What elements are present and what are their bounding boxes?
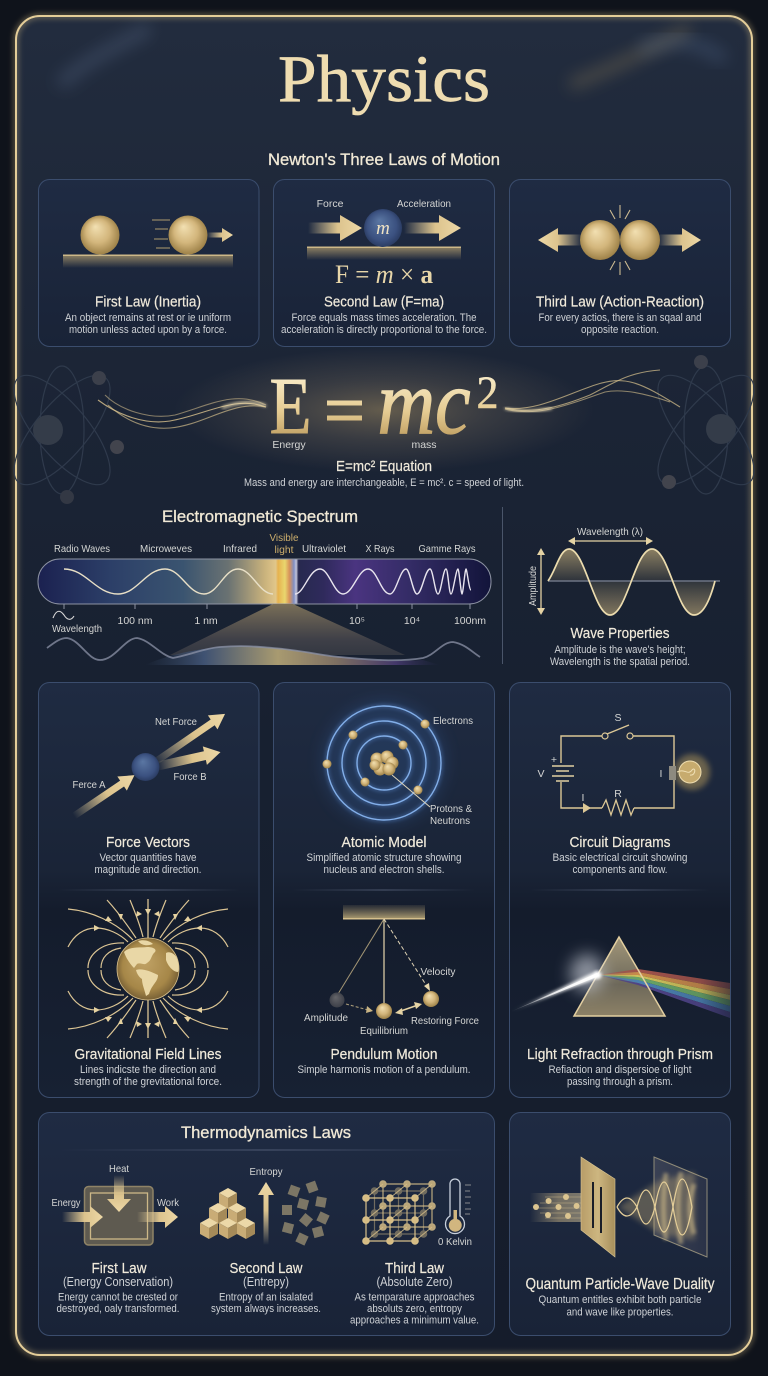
icon: force vectors: Ferce A	[72, 779, 106, 791]
text block: Basic electrical circuit showing	[552, 852, 688, 864]
label: mass: mass	[411, 439, 437, 451]
icon: double slit	[530, 1157, 707, 1257]
label: energy: Energy	[272, 439, 306, 451]
text block	[65, 312, 231, 336]
icon: inertia spheres	[63, 216, 233, 268]
heading: Pendulum Motion	[330, 1046, 438, 1063]
icon: crystal lattice and thermometer	[363, 1179, 472, 1248]
equation glow	[174, 348, 594, 472]
equation E=mc2: mc	[378, 351, 470, 453]
icon: force on mass: Acceleration	[397, 198, 451, 210]
text block: Entropy of an isalated	[219, 1292, 313, 1304]
panel: left column	[38, 682, 259, 1098]
decorative atom left	[0, 361, 126, 504]
prism fan under spectrum	[47, 604, 480, 665]
text block	[56, 1275, 180, 1315]
panel: right column	[510, 682, 730, 1098]
formula: F = m × a	[335, 260, 433, 289]
spectrum labels: Infrared	[223, 543, 257, 555]
text block: For every actios, there is an sqaal and	[538, 312, 702, 324]
heading: Second Law (F=ma)	[324, 294, 444, 310]
equation E=mc2: E	[270, 363, 312, 451]
text block: Lines indicste the direction and	[80, 1064, 216, 1076]
text block	[74, 1064, 222, 1088]
icon: circuit: R	[614, 788, 622, 800]
icon: atom: Protons &	[430, 803, 472, 815]
text block: An object remains at rest or ie uniform	[65, 312, 231, 324]
panel: first law	[38, 180, 259, 346]
panel: second law	[274, 180, 494, 346]
icon: atom	[322, 701, 473, 827]
heading: Newton's laws: Newton's Three Laws of Motion	[268, 150, 500, 169]
text block: components and flow.	[572, 864, 668, 876]
icon: circuit: I	[660, 768, 662, 780]
heading: Third Law (Action-Reaction)	[536, 294, 704, 310]
text block: approaches a minimum value.	[350, 1314, 479, 1326]
text block: and wave like properties.	[566, 1306, 674, 1318]
heading: equation: E=mc² Equation	[336, 458, 432, 475]
heading: Third Law	[385, 1260, 444, 1277]
spectrum axis and scale: 1 nm	[194, 615, 218, 627]
icon: first law energy box: Heat	[109, 1163, 129, 1175]
spectrum labels: light	[274, 544, 294, 556]
text block	[350, 1275, 479, 1326]
icon: force on mass: m	[376, 218, 390, 239]
spectrum labels: Radio Waves	[54, 543, 110, 555]
icon: force on mass: Force	[317, 198, 344, 210]
title: Physics	[278, 42, 490, 116]
text block: As temparature approaches	[354, 1292, 475, 1304]
energy wisps	[98, 370, 680, 428]
heading: Second Law	[230, 1260, 303, 1277]
spectrum axis and scale	[52, 604, 486, 635]
wave properties chart: Amplitude	[527, 566, 539, 606]
heading: Quantum Particle-Wave Duality	[526, 1276, 714, 1293]
text: equation description: Mass and energy are interchangeable, E = mc². c = speed of light.	[244, 477, 524, 489]
text block	[548, 1064, 692, 1088]
icon: circuit	[537, 712, 710, 815]
spectrum labels: Ultraviolet	[302, 543, 346, 555]
panel: quantum	[510, 1112, 730, 1336]
icon: atom: Neutrons	[430, 815, 470, 827]
text block: strength of the grevitational force.	[74, 1076, 222, 1088]
divider	[502, 507, 504, 664]
icon: first law energy box: Work	[157, 1197, 180, 1209]
wave properties chart: Wavelength (λ)	[577, 526, 643, 538]
spectrum axis and scale: 10⁵	[349, 615, 365, 627]
heading: Thermodynamics Laws	[181, 1123, 351, 1142]
text block	[538, 1294, 702, 1318]
heading: Light Refraction through Prism	[527, 1046, 713, 1063]
icon: entropy	[200, 1166, 330, 1246]
text block: nucleus and electron shells.	[324, 864, 444, 876]
spectrum labels	[54, 532, 476, 556]
spectrum axis and scale: Wavelength	[52, 623, 102, 635]
icon: pendulum: Restoring Force	[411, 1015, 479, 1027]
heading: Circuit Diagrams	[570, 834, 670, 851]
panel: third law	[510, 180, 730, 346]
icon: force on mass	[307, 198, 461, 260]
text block	[552, 852, 688, 876]
heading: First Law (Inertia)	[95, 294, 201, 310]
icon: action reaction	[538, 205, 701, 275]
icon: circuit: +	[551, 754, 557, 766]
text block: opposite reaction.	[581, 324, 659, 336]
text block: magnitude and direction.	[94, 864, 202, 876]
spectrum axis and scale: 10⁴	[404, 615, 420, 627]
text block: destroyed, oaly transformed.	[56, 1303, 180, 1315]
icon: force vectors: Net Force	[155, 716, 197, 728]
icon: circuit: V	[537, 768, 545, 780]
panel: middle column	[274, 682, 494, 1098]
text block: Force equals mass times acceleration. The	[292, 312, 476, 324]
icon: circuit: I	[582, 792, 584, 804]
text block: Refiaction and dispersioe of light	[548, 1064, 692, 1076]
icon: force vectors: Force B	[174, 771, 206, 783]
spectrum labels: Gamme Rays	[418, 543, 476, 555]
heading: First Law	[92, 1260, 147, 1277]
text block: Energy cannot be crested or	[58, 1292, 178, 1304]
icon: circuit: S	[614, 712, 622, 724]
icon: atom: Electrons	[433, 715, 473, 727]
icon: force vectors	[69, 707, 230, 823]
text block: passing through a prism.	[567, 1076, 673, 1088]
text block: (Entrepy)	[243, 1275, 289, 1289]
icon: pendulum	[304, 905, 479, 1037]
icon: crystal lattice and thermometer: 0 Kelvin	[438, 1236, 472, 1248]
text block: (Energy Conservation)	[63, 1275, 173, 1289]
heading: wave properties: Wave Properties	[570, 625, 670, 642]
spectrum axis and scale: 100 nm	[117, 615, 153, 627]
decorative atom right	[642, 355, 768, 499]
icon: pendulum: Velocity	[420, 966, 456, 978]
spectrum labels: X Rays	[366, 543, 394, 555]
spectrum labels: Microweves	[140, 543, 192, 555]
spectrum labels: Visible	[270, 532, 299, 544]
text block	[281, 312, 487, 336]
text block: Quantum entitles exhibit both particle	[538, 1294, 702, 1306]
text block: absoluts zero, entropy	[367, 1303, 462, 1315]
heading: EM spectrum: Electromagnetic Spectrum	[162, 507, 358, 526]
spectrum axis and scale: 100nm	[454, 615, 486, 627]
equation E=mc2: 2	[476, 367, 498, 419]
text block	[306, 852, 462, 876]
text: wave properties: Wavelength is the spatial period.	[550, 656, 690, 668]
text block	[94, 852, 202, 876]
icon: pendulum: Equilibrium	[360, 1025, 408, 1037]
heading: Atomic Model	[342, 834, 426, 851]
icon: gravitational field	[68, 899, 228, 1038]
text block: Simplified atomic structure showing	[306, 852, 462, 864]
text block: system always increases.	[211, 1303, 321, 1315]
text block: motion unless acted upon by a force.	[69, 324, 227, 336]
icon: entropy: Entropy	[250, 1166, 283, 1178]
icon: first law energy box: Energy	[52, 1197, 81, 1209]
heading: Gravitational Field Lines	[74, 1046, 222, 1063]
text block: Simple harmonis motion of a pendulum.	[298, 1064, 470, 1076]
icon: prism	[510, 937, 730, 1018]
wave properties chart	[527, 526, 720, 615]
text block	[211, 1275, 321, 1315]
icon: pendulum: Amplitude	[304, 1012, 348, 1024]
spectrum band	[38, 559, 491, 604]
heading: Force Vectors	[106, 834, 190, 851]
text block	[538, 312, 702, 336]
panel: thermodynamics	[38, 1112, 494, 1336]
text block: (Absolute Zero)	[376, 1275, 452, 1289]
text: wave properties: Amplitude is the wave's height;	[554, 644, 686, 656]
icon: first law energy box	[52, 1163, 180, 1245]
text: wave properties	[550, 644, 690, 668]
equation E=mc2	[270, 351, 498, 453]
text block: acceleration is directly proportional to the force.	[281, 324, 487, 336]
text block: Vector quantities have	[100, 852, 196, 864]
